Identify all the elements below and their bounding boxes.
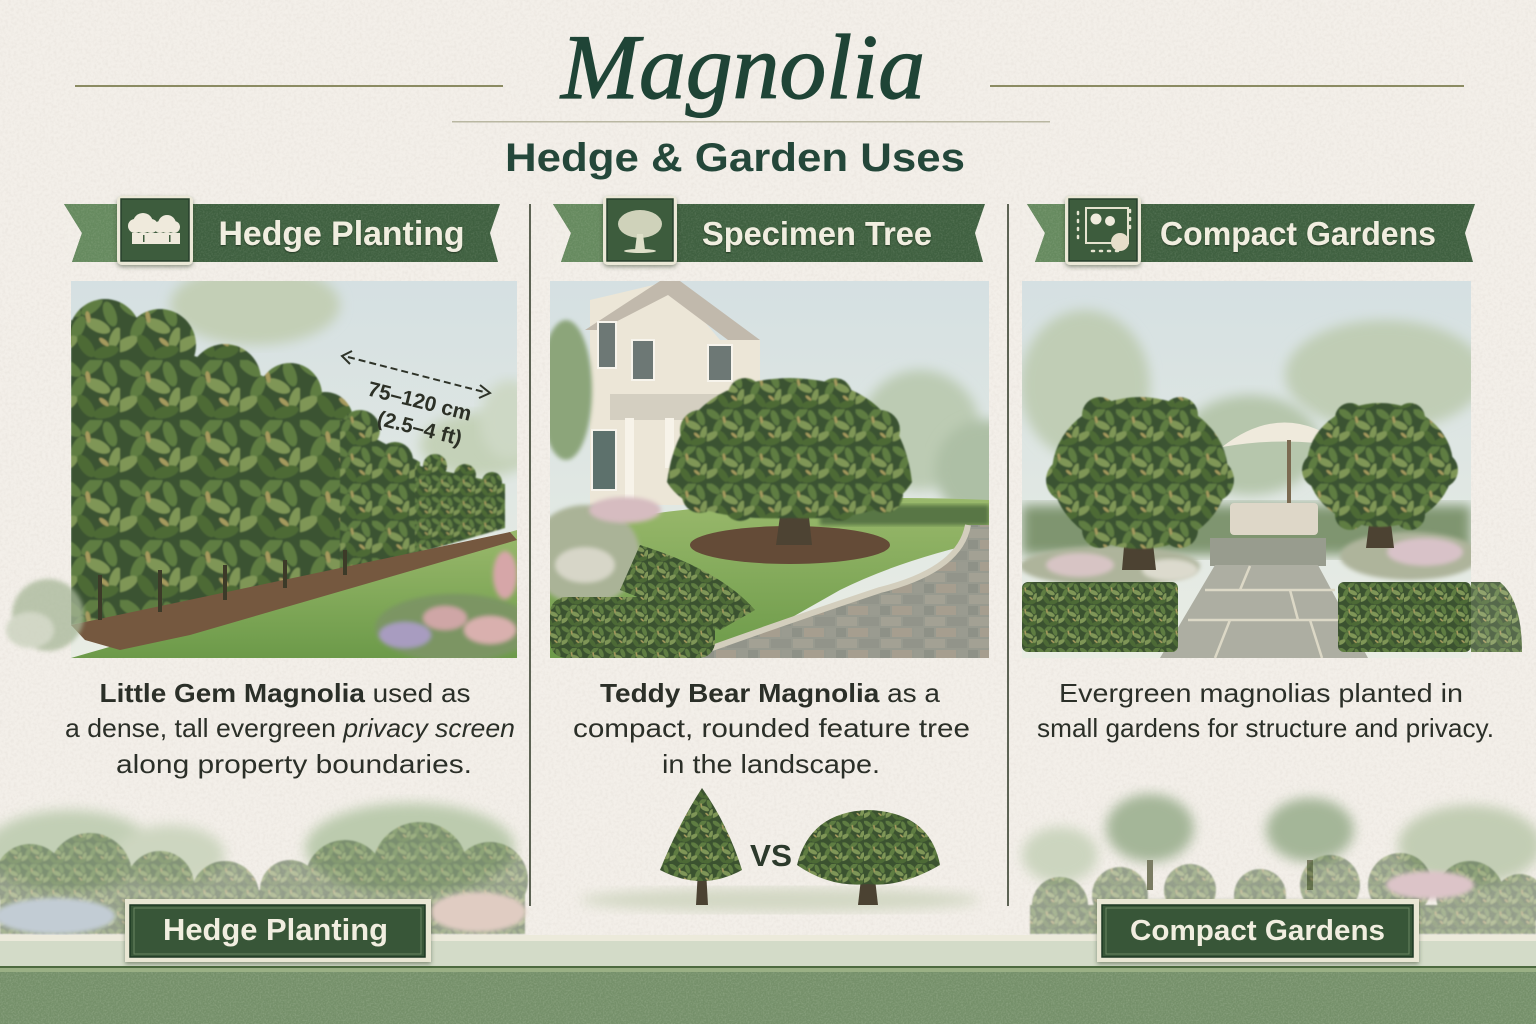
illustration: bottom right planting (1022, 794, 1536, 934)
right tree (1366, 525, 1394, 548)
illustration: compact garden (1020, 281, 1485, 658)
text: compact description (1037, 678, 1494, 743)
dimension: hedge height (342, 351, 490, 450)
flowers (375, 549, 517, 658)
text: specimen description (573, 678, 970, 779)
icon: garden plan (1065, 196, 1141, 265)
umbrella (1222, 422, 1320, 447)
illustration: bottom left planting (0, 803, 528, 934)
text: specimen description: compact, rounded feature tree (573, 713, 970, 743)
mulch strip (71, 532, 517, 650)
text: hedge description: a dense, tall evergreen privacy screen (65, 713, 515, 743)
text: specimen description: Teddy Bear Magnolia as a (600, 678, 941, 708)
subtitle: Hedge & Garden Uses (505, 136, 965, 180)
label: hedge planting (125, 899, 431, 962)
text: hedge description (65, 678, 515, 779)
comparison: conical versus round tree: VS (750, 838, 792, 873)
crown (667, 378, 912, 521)
text: compact description: small gardens for structure and privacy. (1037, 713, 1494, 743)
hedges (1022, 582, 1178, 652)
label: compact gardens (1097, 899, 1419, 962)
illustration: hedge row (71, 281, 517, 658)
side tree (550, 318, 595, 462)
shrub overflow left (6, 579, 84, 651)
driveway (684, 525, 989, 658)
label: compact gardens: Compact Gardens (1130, 915, 1385, 947)
icon: tree (603, 196, 677, 265)
text: hedge description: Little Gem Magnolia used as (100, 678, 470, 708)
trunk (776, 517, 812, 545)
lawn (550, 498, 989, 658)
icon: conical tree (660, 788, 742, 905)
text: hedge description: along property boundaries. (116, 749, 472, 779)
banner: specimen tree (553, 204, 985, 262)
icon: hedge box (117, 196, 193, 265)
hedge far (415, 454, 505, 554)
label: hedge planting: Hedge Planting (163, 912, 388, 947)
banner: compact gardens: Compact Gardens (1160, 215, 1436, 252)
illustration: specimen tree and driveway (550, 281, 989, 658)
banner: compact gardens (1027, 204, 1475, 262)
left tree (1122, 546, 1156, 570)
hedge near (69, 299, 353, 625)
panel: hedge planting (0, 196, 540, 934)
flowers (1020, 546, 1200, 586)
mulch bed (690, 526, 890, 564)
hedge overflow right (1471, 582, 1522, 652)
icon: round tree (797, 810, 940, 905)
text: compact description: Evergreen magnolias planted in (1059, 678, 1463, 708)
banner: hedge planting (64, 204, 500, 262)
text: specimen description: in the landscape. (662, 749, 880, 779)
lawn (71, 530, 517, 658)
banner: hedge planting: Hedge Planting (218, 215, 464, 253)
stone path (1160, 565, 1368, 658)
patio sofa (1230, 503, 1318, 535)
panel: specimen tree (550, 195, 989, 914)
ground strip (0, 935, 1536, 1024)
house (590, 281, 760, 505)
hedge mid (340, 410, 420, 572)
title: Magnolia (559, 16, 925, 118)
banner: specimen tree: Specimen Tree (702, 215, 932, 252)
steps (1210, 538, 1326, 566)
panel: compact gardens (1020, 196, 1536, 934)
dimension: hedge height: 75–120 cm (365, 378, 474, 426)
left shrubs (550, 502, 641, 600)
comparison: conical versus round tree (580, 788, 980, 912)
dimension: hedge height: (2.5–4 ft) (375, 407, 464, 450)
